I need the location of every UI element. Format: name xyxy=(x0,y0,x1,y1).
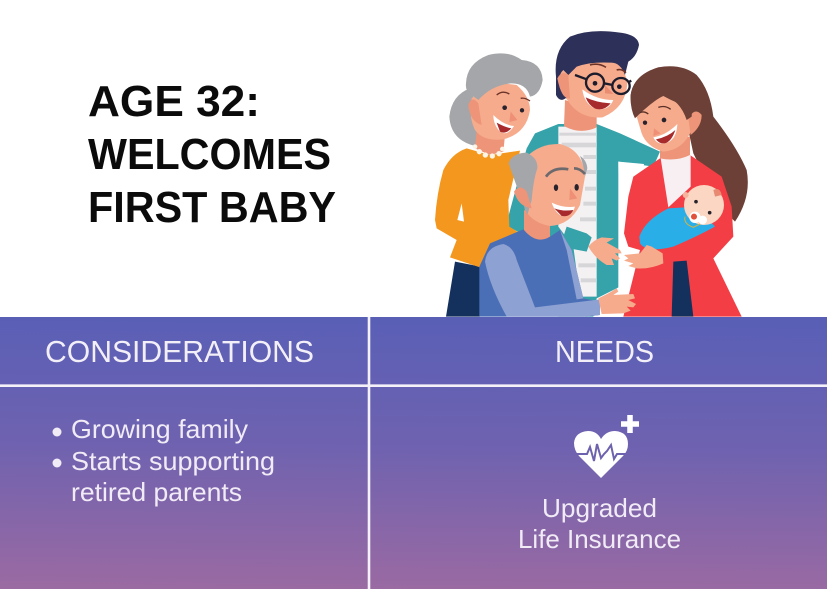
family illustration xyxy=(435,31,748,317)
table panel xyxy=(0,317,827,589)
needs text: Life Insurance xyxy=(518,524,681,554)
heading: considerations: CONSIDERATIONS xyxy=(45,334,314,369)
young man xyxy=(508,31,660,317)
table grid lines xyxy=(0,317,827,589)
considerations list xyxy=(52,414,275,507)
icon: heart with pulse and plus xyxy=(574,415,639,478)
heading: needs: NEEDS xyxy=(555,334,654,369)
needs text xyxy=(518,493,681,554)
considerations list: retired parents xyxy=(71,477,242,507)
title: FIRST BABY xyxy=(88,183,336,232)
young mother with baby xyxy=(623,66,748,317)
needs text: Upgraded xyxy=(542,493,657,523)
title: AGE 32: xyxy=(88,77,260,126)
grandfather xyxy=(479,144,636,317)
grandmother xyxy=(435,53,543,317)
considerations list: Growing family xyxy=(71,414,248,444)
considerations list: Starts supporting xyxy=(71,446,275,476)
title: WELCOMES xyxy=(88,130,331,179)
title xyxy=(88,77,336,232)
